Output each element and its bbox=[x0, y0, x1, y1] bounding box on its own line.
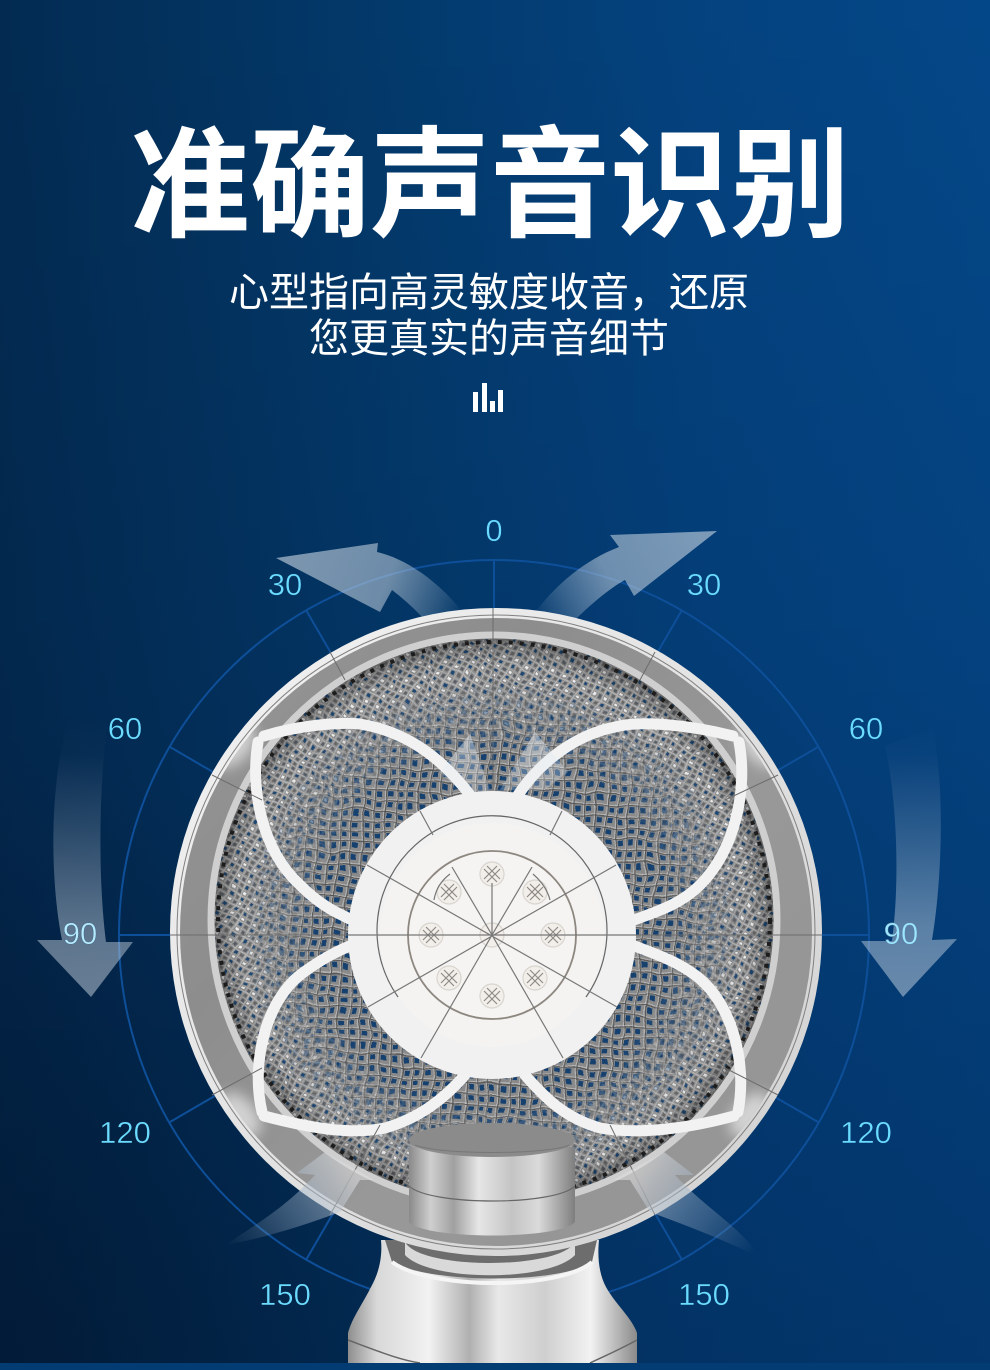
rim bbox=[170, 608, 822, 1256]
centre capsule disc bbox=[348, 791, 636, 1079]
angle labels: 90 bbox=[63, 916, 97, 951]
angle labels: 120 bbox=[840, 1115, 892, 1150]
subtitle text: 您更真实的声音细节 bbox=[309, 317, 669, 361]
angle labels: 120 bbox=[99, 1115, 151, 1150]
title: 准确声音识别 bbox=[130, 119, 850, 253]
arrow: bottom left bbox=[225, 1152, 374, 1245]
grid lines over head bbox=[170, 608, 822, 1215]
mesh bbox=[214, 638, 774, 1202]
angle labels: 90 bbox=[884, 916, 918, 951]
angle labels bbox=[63, 513, 918, 1312]
subtitle text bbox=[229, 271, 749, 361]
arrow: top left bbox=[276, 543, 465, 620]
wind arrows on mesh bbox=[440, 732, 568, 795]
subtitle text: 心型指向高灵敏度收音，还原 bbox=[229, 271, 749, 315]
icon: equalizer bars bbox=[473, 383, 503, 412]
angle labels: 150 bbox=[259, 1277, 311, 1312]
angle labels: 60 bbox=[849, 711, 883, 746]
mesh edge beads bbox=[218, 642, 770, 1198]
arrow: left side bbox=[37, 706, 133, 997]
white petal bands bbox=[256, 723, 742, 1131]
microphone head bbox=[170, 608, 822, 1256]
polar grid bbox=[119, 560, 870, 1310]
capsule holes bbox=[419, 862, 565, 1008]
light inner ring bbox=[211, 635, 777, 1205]
angle labels: 60 bbox=[108, 711, 142, 746]
arrow: bottom right bbox=[613, 1152, 760, 1258]
bottom strip bbox=[0, 1363, 990, 1370]
microphone cylinder bbox=[409, 1123, 575, 1236]
angle labels: 30 bbox=[268, 567, 302, 602]
angle labels: 150 bbox=[678, 1277, 730, 1312]
angle labels: 0 bbox=[485, 513, 503, 548]
capsule spokes bbox=[348, 811, 636, 1058]
arrow: right side bbox=[861, 728, 957, 997]
angle labels: 30 bbox=[687, 567, 721, 602]
arrow: top right bbox=[534, 531, 717, 620]
microphone base bbox=[348, 1240, 637, 1363]
rim glints bbox=[206, 715, 789, 1145]
